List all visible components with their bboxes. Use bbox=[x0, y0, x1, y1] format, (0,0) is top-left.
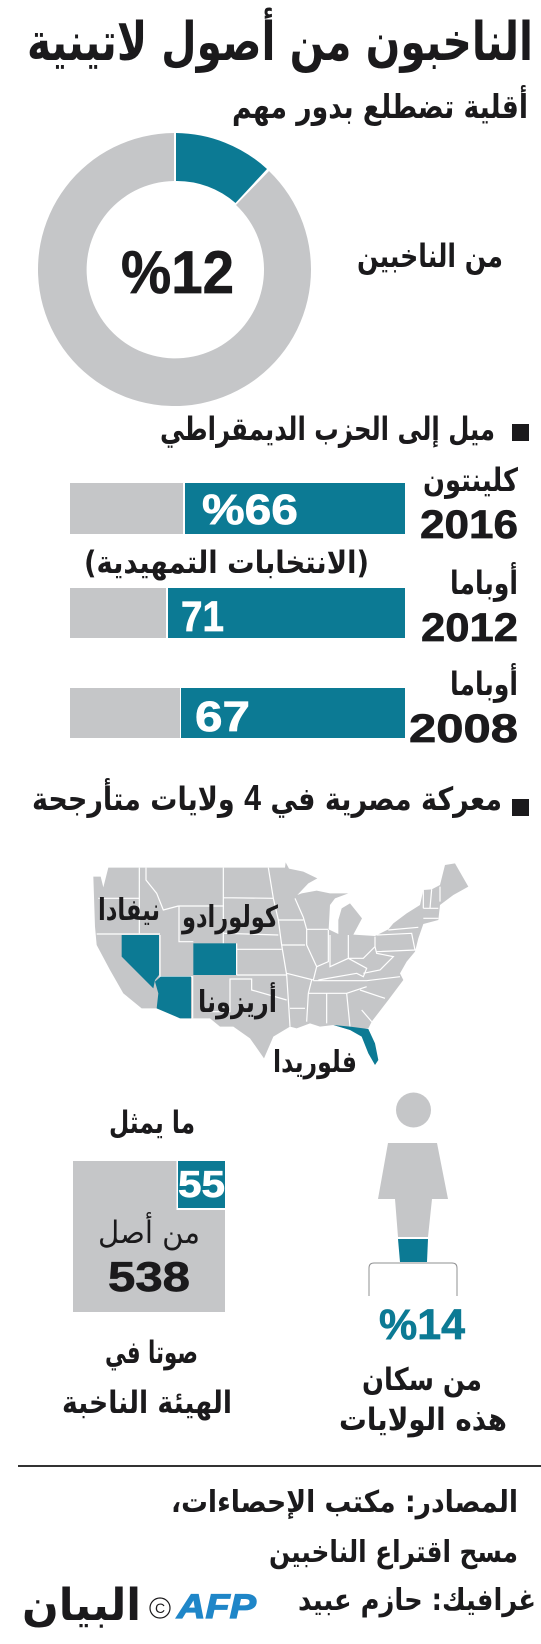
Al Bayan logo: البيان bbox=[22, 1580, 141, 1631]
heading bullet bbox=[512, 799, 529, 816]
heading: lean to the Democratic party bbox=[160, 410, 529, 449]
donut value: %12 bbox=[121, 239, 234, 306]
bar row: Obama 2012 bbox=[70, 562, 518, 650]
total votes square bbox=[73, 1161, 225, 1312]
state borders bbox=[97, 868, 440, 1027]
footer rule bbox=[18, 1465, 541, 1467]
538 value: 538 bbox=[108, 1253, 190, 1300]
AFP logo: AFP bbox=[176, 1588, 256, 1626]
bar row: Obama 2008 bbox=[70, 663, 518, 751]
bracket bbox=[369, 1263, 457, 1296]
bar label value: 67 bbox=[195, 693, 250, 741]
country silhouette bbox=[93, 862, 468, 1058]
caption bottom line 1: صوتا في bbox=[105, 1335, 198, 1371]
bar value bbox=[181, 688, 405, 738]
map label: Florida: فلوريدا bbox=[273, 1045, 357, 1080]
state: Florida bbox=[333, 1025, 378, 1065]
year: 2012 bbox=[421, 606, 518, 650]
year: 2008 bbox=[409, 707, 518, 751]
map label: Arizona: أريزونا bbox=[198, 982, 277, 1020]
state: Arizona bbox=[155, 977, 191, 1018]
electoral votes panel bbox=[62, 1105, 232, 1421]
copyright symbol: C bbox=[155, 1600, 165, 1616]
out of: من أصل bbox=[98, 1212, 200, 1251]
population panel bbox=[339, 1092, 507, 1438]
heading bullet bbox=[512, 424, 529, 441]
caption line 2: هذه الولايات bbox=[339, 1402, 507, 1438]
primaries note: (الانتخابات التمهيدية) bbox=[84, 545, 369, 581]
donut caption: من الناخبين bbox=[357, 237, 503, 275]
55 votes square bbox=[176, 1161, 225, 1210]
candidate name: أوباما bbox=[450, 663, 518, 703]
person icon bbox=[378, 1092, 448, 1262]
teal legs bbox=[398, 1239, 428, 1262]
map of the United States bbox=[93, 862, 468, 1065]
caption top: ما يمثل bbox=[109, 1105, 195, 1141]
copyright symbol bbox=[150, 1598, 170, 1618]
map label: Nevada: نيفادا bbox=[98, 893, 160, 928]
donut remainder segment bbox=[38, 133, 311, 406]
candidate name: كلينتون bbox=[423, 461, 518, 499]
bar remainder bbox=[70, 483, 183, 534]
14 percent value: %14 bbox=[379, 1301, 465, 1349]
donut teal segment bbox=[176, 133, 267, 203]
heading: decisive battle in 4 swing states bbox=[32, 777, 529, 818]
bar row: Clinton 2016 bbox=[70, 461, 518, 547]
candidate name: أوباما bbox=[450, 562, 518, 602]
caption line 1: من سكان bbox=[362, 1362, 482, 1398]
year: 2016 bbox=[420, 503, 518, 547]
heading text: معركة مصرية في 4 ولايات متأرجحة bbox=[32, 777, 502, 818]
bar label value: %66 bbox=[202, 486, 298, 534]
bar remainder bbox=[70, 688, 180, 738]
bar value bbox=[185, 483, 405, 534]
state: Nevada bbox=[122, 935, 159, 988]
donut chart: 12 percent of voters bbox=[38, 133, 311, 406]
caption bottom line 2: الهيئة الناخبة bbox=[62, 1385, 232, 1421]
55 value: 55 bbox=[178, 1164, 225, 1205]
bar remainder bbox=[70, 588, 166, 638]
bar value bbox=[168, 588, 405, 638]
bar label value: 71 bbox=[181, 593, 224, 641]
state: Colorado bbox=[193, 943, 236, 975]
map label: Colorado: كولورادو bbox=[180, 900, 278, 935]
